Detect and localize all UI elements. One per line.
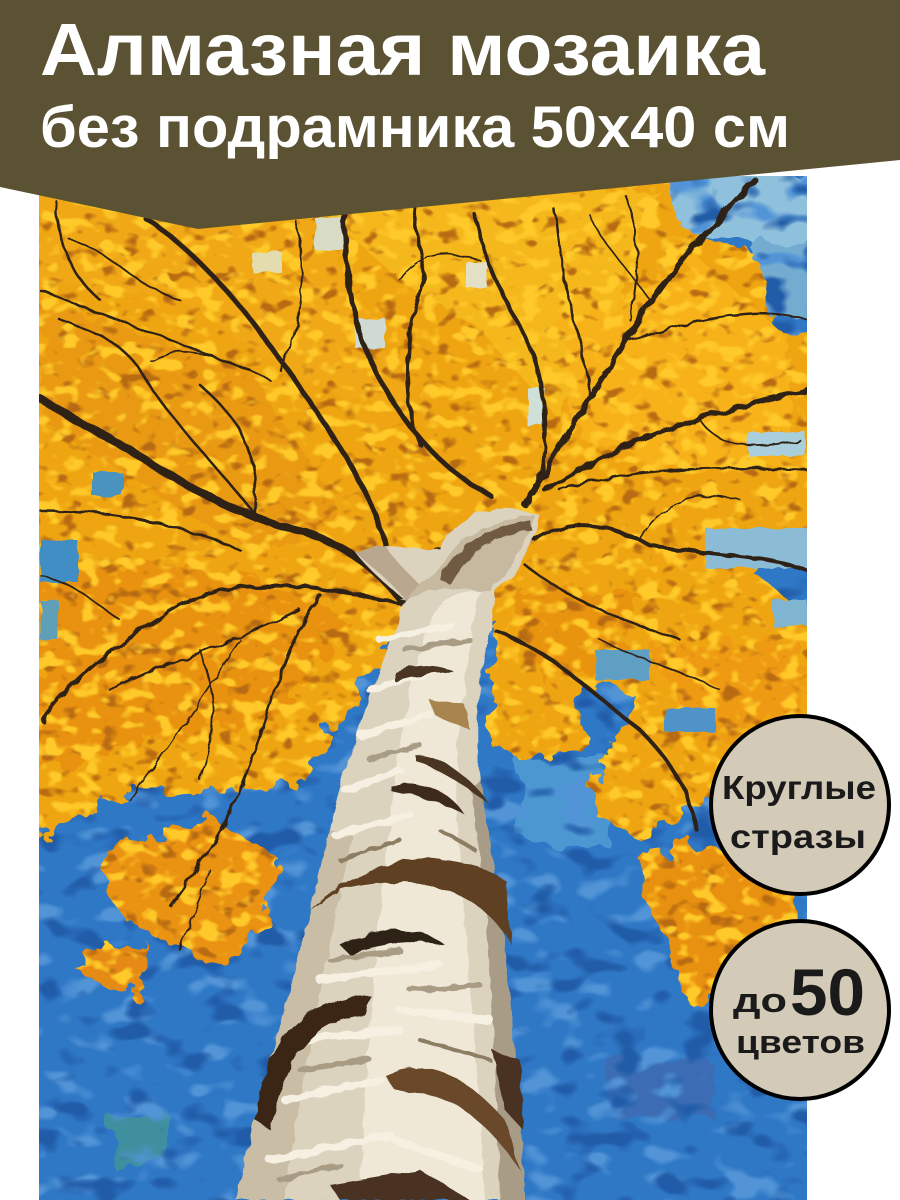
header banner <box>0 0 900 229</box>
birch trunk <box>236 508 540 1200</box>
badge: round rhinestones: стразы <box>730 818 866 855</box>
badge: round rhinestones: Круглые <box>722 769 876 806</box>
painting: birch tree in autumn <box>10 160 840 1200</box>
sky gaps in canopy <box>40 218 807 732</box>
badge: up to 50 colours: до <box>733 982 787 1020</box>
badge: up to 50 colours <box>711 921 889 1099</box>
title: Алмазная мозаика <box>40 8 766 91</box>
branches <box>40 180 807 950</box>
badge: round rhinestones <box>711 716 889 894</box>
trunk bark marks <box>255 520 532 1200</box>
subtitle: без подрамника 50х40 см <box>40 95 790 160</box>
badge: up to 50 colours: цветов <box>736 1024 865 1060</box>
canopy foliage <box>20 170 830 1005</box>
badge: up to 50 colours: 50 <box>790 955 865 1029</box>
trunk bark streaks <box>270 625 490 1180</box>
sky background <box>10 160 840 1200</box>
